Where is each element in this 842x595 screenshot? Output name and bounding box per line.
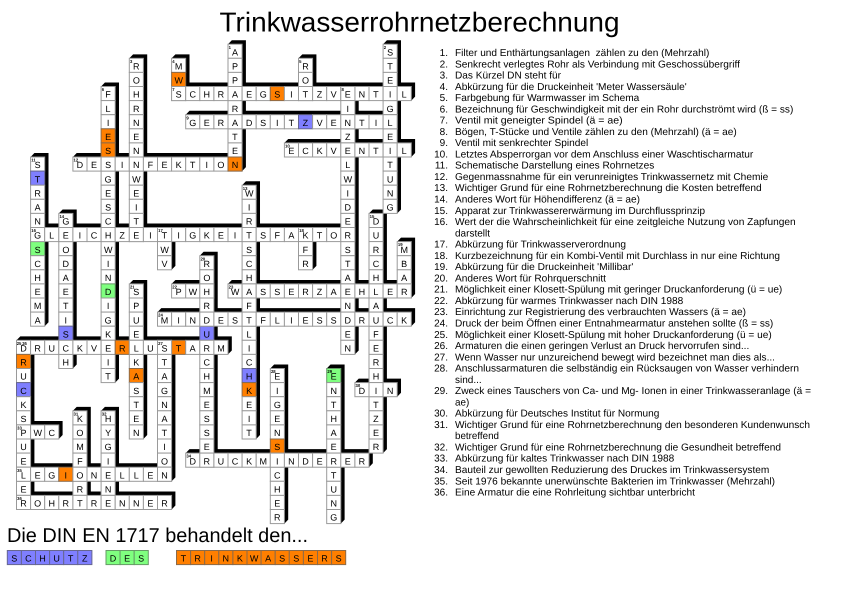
solution prompt heading: Die DIN EN 1717 behandelt den... bbox=[7, 525, 308, 547]
clue 30: 30. bbox=[434, 409, 448, 420]
clue 29: Zweck eines Tauschers von Ca- und Mg- Ionen in einer Trinkwasseranlage (ä = bbox=[455, 386, 811, 397]
clue 25: Möglichkeit einer Klosett-Spülung mit hoher Druckanforderung (ü = ue) bbox=[455, 330, 772, 341]
word 25: DRUCKSPUELER bbox=[16, 331, 35, 521]
word 1: APPARATEN bbox=[228, 35, 246, 182]
clue 5: 5. bbox=[440, 93, 448, 104]
word 14: GEODAETISCH bbox=[59, 204, 79, 380]
clue 20: Anderes Wort für Rohrquerschnitt bbox=[455, 273, 606, 284]
clue 36: Eine Armatur die eine Rohrleitung sichtbar unterbricht bbox=[455, 488, 695, 498]
clue 35: 35. bbox=[434, 476, 448, 487]
clue 7: 7. bbox=[440, 116, 448, 127]
clue 23: Einrichtung zur Registrierung des verbrauchten Wassers (ä = ae) bbox=[455, 307, 746, 318]
word 27: STAGNATION bbox=[158, 331, 177, 493]
word 16: GLEICHZEITIGKEITSFAKTOR bbox=[31, 218, 359, 253]
clue 29 bbox=[434, 386, 811, 408]
clue 31: Wichtiger Grund für eine Rohrnetzberechnung den besonderen Kundenwunsch bbox=[455, 420, 810, 431]
clue 4: 4. bbox=[440, 82, 448, 93]
clue 33: Abkürzung für kaltes Trinkwasser nach DIN 1988 bbox=[455, 454, 675, 465]
word 35: LEGIONELLEN bbox=[16, 458, 175, 493]
word 24: MINDESTFLIESSDRUCK bbox=[158, 303, 415, 337]
clue 9: 9. bbox=[440, 138, 448, 149]
clue 26: 26. bbox=[434, 341, 448, 352]
clue 33: 33. bbox=[434, 454, 448, 465]
word 32: HYGIENE bbox=[101, 401, 121, 521]
clue 15: Apparat zur Trinkwassererwärmung im Durchflussprinzip bbox=[455, 206, 705, 217]
clue 21: Möglichkeit einer Klosett-Spülung mit geringer Druckanforderung (ü = ue) bbox=[455, 285, 782, 296]
clue 17: Abkürzung für Trinkwasserverordnung bbox=[455, 240, 626, 251]
clue 10: 10. bbox=[434, 149, 448, 160]
word 34: DRUCKMINDERER bbox=[186, 444, 373, 478]
clue 3: Das Kürzel DN steht für bbox=[455, 70, 562, 82]
clue 6: 6. bbox=[440, 104, 448, 115]
word 11: STRANGSCHEMA bbox=[31, 148, 49, 337]
word 22: PWH bbox=[172, 274, 218, 309]
clue 35: Seit 1976 bekannte unerwünschte Bakterien im Trinkwasser (Mehrzahl) bbox=[455, 476, 775, 487]
clue 18: Kurzbezeichnung für ein Kombi-Ventil mit Durchlass in nur eine Richtung bbox=[455, 251, 780, 262]
word 13: WIRTSCHAFTLICHKEIT bbox=[242, 176, 262, 450]
clue 28: Anschlussarmaturen die selbständig ein Rücksaugen von Wasser verhindern bbox=[455, 364, 799, 375]
clue 27: Wenn Wasser nur unzureichend bewegt wird bezeichnet man dies als... bbox=[455, 352, 775, 363]
clue 19: Abkürzung für die Druckeinheit 'Millibar' bbox=[455, 262, 633, 273]
clue 11: Schematische Darstellung eines Rohrnetzes bbox=[455, 161, 654, 172]
clue 14: 14. bbox=[434, 194, 448, 206]
word 28: EIGENSICHER bbox=[270, 359, 290, 535]
clue 12: 12. bbox=[434, 172, 448, 183]
clue 25: 25. bbox=[434, 330, 448, 341]
clue 31 bbox=[434, 420, 810, 442]
clue 27: 27. bbox=[434, 352, 448, 363]
clue 13: Wichtiger Grund für eine Rohrnetzberechnung die Kosten betreffend bbox=[455, 183, 762, 194]
clue 1: 1. bbox=[440, 48, 448, 59]
word 19: MBAR bbox=[397, 232, 415, 309]
word 17: TWV bbox=[158, 218, 176, 281]
clue 32: Wichtiger Grund für eine Rohrnetzberechnung die Gesundheit betreffend bbox=[455, 442, 781, 454]
clue 9: Ventil mit senkrechter Spindel bbox=[455, 138, 588, 149]
clue 19: 19. bbox=[434, 262, 448, 273]
word 5: ROT bbox=[298, 49, 317, 112]
clue 11: 11. bbox=[435, 161, 448, 172]
clue 29: 29. bbox=[434, 386, 448, 397]
word 21: SPUELKASTEN bbox=[129, 274, 148, 450]
clue 15: 15. bbox=[434, 206, 448, 217]
word 9: GERADSITZVENTIL bbox=[186, 105, 402, 140]
clue 2: 2. bbox=[440, 59, 448, 70]
clue 36: 36. bbox=[434, 488, 448, 498]
clue 29: ae) bbox=[455, 397, 469, 408]
word 36: ROHRTRENNER bbox=[16, 486, 175, 521]
word 33: PWC bbox=[16, 415, 63, 450]
crossword puzzle bbox=[16, 35, 416, 535]
word 6: FLIESSGESCHWINDIGKEIT bbox=[101, 77, 121, 394]
clue 26: Armaturen die einen geringen Verlust an Druck hervorrufen sind... bbox=[455, 341, 749, 352]
clue 7: Ventil mit geneigter Spindel (ä = ae) bbox=[455, 116, 623, 127]
clue 31: betreffend bbox=[455, 431, 499, 442]
word 4: MWS bbox=[172, 49, 190, 112]
clue 32: 32. bbox=[434, 442, 448, 454]
word 10: ECKVENTIL bbox=[284, 133, 416, 168]
solution word: DES bbox=[106, 548, 152, 576]
word 29: ENTHAERTUNG bbox=[327, 359, 345, 535]
clue 22: 22. bbox=[434, 296, 448, 307]
clue 16: 16. bbox=[434, 217, 448, 228]
word 15: DURCHLAUFERHITZER bbox=[369, 204, 389, 464]
clue 2: Senkrecht verlegtes Rohr als Verbindung mit Geschossübergriff bbox=[455, 59, 740, 70]
clue 5: Farbgebung für Warmwasser im Schema bbox=[455, 93, 640, 104]
word 12: DESINFEKTION bbox=[73, 148, 246, 182]
word 26: DRUCKVERLUSTARM bbox=[22, 331, 231, 366]
solution word boxes bbox=[7, 548, 350, 576]
clue 20: 20. bbox=[434, 273, 448, 284]
word 8: EINZELWIDERSTAENDEN bbox=[341, 77, 361, 366]
clue 1: Filter und Enthärtungsanlagen zählen zu den (Mehrzahl) bbox=[455, 48, 709, 59]
clue 10: Letztes Absperrorgan vor dem Anschluss einer Waschtischarmatur bbox=[455, 149, 754, 160]
solution word: SCHUTZ bbox=[7, 548, 96, 576]
clue 8: Bögen, T-Stücke und Ventile zählen zu den (Mehrzahl) (ä = ae) bbox=[455, 127, 737, 138]
clue 6: Bezeichnung für Geschwindigkeit mit der ein Rohr durchströmt wird (ß = ss) bbox=[455, 104, 793, 115]
word 3: ROHRNENNWEITE bbox=[129, 49, 149, 253]
word 2: STEIGLEITUNG bbox=[383, 35, 403, 225]
word 30: DIN bbox=[355, 373, 401, 408]
clue 22: Abkürzung für warmes Trinkwasser nach DIN 1988 bbox=[455, 296, 684, 307]
word 18: KFR bbox=[298, 218, 317, 281]
clue 28: 28. bbox=[434, 364, 448, 375]
clue 24: 24. bbox=[434, 318, 448, 330]
clue 3: 3. bbox=[440, 70, 448, 82]
word 31: KOMFORT bbox=[73, 401, 91, 521]
word 7: SCHRAEGSITZVENTIL bbox=[172, 77, 416, 112]
3D block shadow of the crossword words bbox=[16, 40, 415, 524]
clue 28: sind... bbox=[455, 375, 482, 386]
clue 34: Bauteil zur gewollten Reduzierung des Druckes im Trinkwassersystem bbox=[455, 465, 769, 476]
clue 17: 17. bbox=[434, 240, 448, 251]
clue 31: 31. bbox=[434, 420, 448, 431]
word 20: ROHRDURCHMESSER bbox=[200, 246, 218, 478]
clue 30: Abkürzung für Deutsches Institut für Normung bbox=[455, 409, 659, 420]
clue 28 bbox=[434, 364, 799, 386]
clue 14: Anderes Wort für Höhendifferenz (ä = ae) bbox=[455, 194, 640, 206]
clue 16 bbox=[434, 217, 796, 239]
clue 34: 34. bbox=[434, 465, 448, 476]
clue 8: 8. bbox=[440, 127, 448, 138]
clue 24: Druck der beim Öffnen einer Entnahmearmatur anstehen sollte (ß = ss) bbox=[455, 318, 773, 330]
clue 16: darstellt bbox=[455, 228, 490, 239]
clue 4: Abkürzung für die Druckeinheit 'Meter Wassersäule' bbox=[455, 82, 687, 93]
clue list bbox=[434, 48, 811, 498]
clue 21: 21. bbox=[434, 285, 448, 296]
title: Trinkwasserrohrnetzberechnung bbox=[220, 7, 620, 38]
clue 16: Wert der die Wahrscheinlichkeit für eine zeitgleiche Nutzung von Zapfungen bbox=[455, 217, 796, 228]
clue 13: 13. bbox=[434, 183, 448, 194]
word 23: WASSERZAEHLER bbox=[228, 274, 415, 309]
clue 18: 18. bbox=[434, 251, 448, 262]
solution word: TRINKWASSERS bbox=[176, 548, 350, 576]
clue 23: 23. bbox=[434, 307, 448, 318]
clue 12: Gegenmassnahme für ein verunreinigtes Trinkwassernetz mit Chemie bbox=[455, 172, 769, 183]
